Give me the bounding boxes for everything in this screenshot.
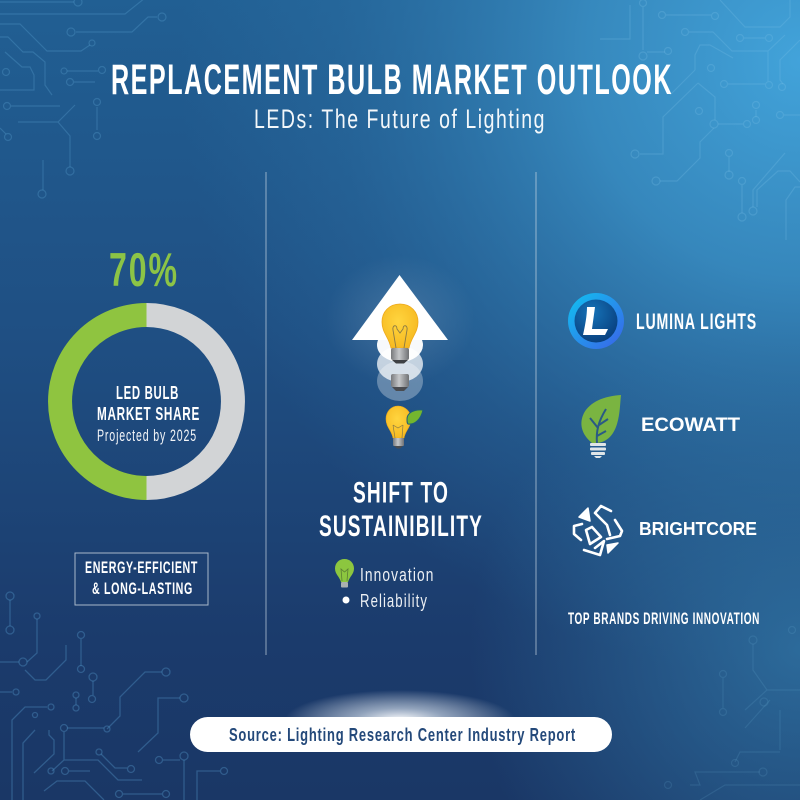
brand: Lumina Lights — [568, 293, 757, 349]
donut label: Projected by 2025 — [97, 427, 197, 445]
list item: reliability — [342, 590, 428, 611]
source pill: Source: Lighting Research Center Industry Report — [229, 724, 576, 745]
panel: top brands — [568, 293, 760, 628]
circuit pattern: bottom left — [0, 592, 228, 800]
source pill — [190, 717, 612, 752]
stat: 70 percent: 70% — [109, 243, 179, 296]
panel: shift to sustainability — [319, 255, 483, 611]
donut label — [97, 383, 200, 445]
heading: shift to sustainability: SUSTAINIBILITY — [319, 510, 483, 543]
heading: shift to sustainability: SHIFT TO — [353, 476, 449, 510]
icon: bulb with leaf — [386, 406, 423, 448]
column dividers — [266, 172, 536, 655]
icon: rising bulb with arrow — [325, 255, 475, 401]
donut label: LED BULB — [116, 383, 179, 403]
donut label: MARKET SHARE — [97, 404, 200, 424]
brand: EcoWatt: ECOWATT — [641, 414, 740, 436]
circuit pattern: bottom right — [664, 626, 800, 800]
panel: LED market share — [60, 243, 233, 605]
list item: reliability: Reliability — [360, 590, 428, 611]
callout: energy-efficient — [75, 553, 208, 605]
brand: EcoWatt — [581, 395, 740, 458]
brand: BrightCore — [574, 506, 757, 555]
list item: innovation — [335, 559, 434, 588]
brand: BrightCore: BRIGHTCORE — [639, 519, 757, 539]
callout: energy-efficient: ENERGY-EFFICIENT — [85, 559, 198, 577]
circuit pattern: top left — [0, 0, 166, 198]
heading: shift to sustainability — [319, 476, 483, 543]
source glow — [285, 690, 515, 750]
circuit pattern: top right — [600, 0, 800, 240]
donut chart — [60, 315, 233, 488]
callout: energy-efficient: & LONG-LASTING — [92, 580, 193, 598]
subtitle: LEDs: The Future of Lighting — [254, 104, 546, 134]
list item: innovation: Innovation — [360, 564, 434, 585]
